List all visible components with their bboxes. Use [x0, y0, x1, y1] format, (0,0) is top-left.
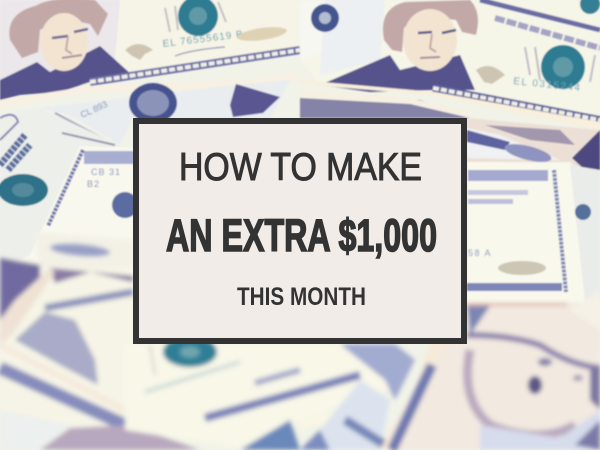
note: pale strip under the top-left bill — [0, 72, 300, 108]
note: fifty dollar bill, right of the panel: 58 A — [468, 248, 492, 258]
panel frame — [136, 121, 464, 341]
panel: title card — [136, 121, 464, 341]
background: pile of banknotes, upper area — [0, 0, 600, 303]
note: top-left twenty dollar bill: EL 76555619 B — [162, 29, 244, 50]
note: top-left twenty dollar bill — [0, 0, 300, 100]
note: top-right twenty dollar bill: EL 0315244 — [513, 76, 582, 94]
note: second bill with dark seal: CL 893 — [79, 99, 109, 120]
note: fifty dollar bill, left of the panel: CB 31 — [91, 167, 121, 177]
note: left bill with teal seal — [0, 108, 130, 260]
heading: this month: THIS MONTH — [237, 283, 366, 311]
note: fifty dollar bill, left of the panel: B2 — [87, 179, 100, 189]
background: pile of banknotes, blurred foreground — [0, 232, 600, 450]
heading: an extra $1,000: AN EXTRA $1,000 — [166, 210, 437, 261]
note: cream strip and dark band above the panel — [300, 80, 600, 130]
heading: how to make: HOW TO MAKE — [179, 146, 422, 189]
note: fifty dollar bill, right of the panel — [467, 162, 600, 303]
note: top-right twenty dollar bill — [300, 0, 600, 120]
note: fifty dollar bill, left of the panel — [15, 146, 140, 275]
note: second bill with dark seal — [40, 80, 290, 145]
note: blurred bills lower left — [0, 232, 200, 450]
note: blurred bill below the panel — [125, 337, 415, 450]
note: bills right of the panel — [467, 118, 600, 185]
note: large portrait bill lower right — [380, 290, 600, 450]
